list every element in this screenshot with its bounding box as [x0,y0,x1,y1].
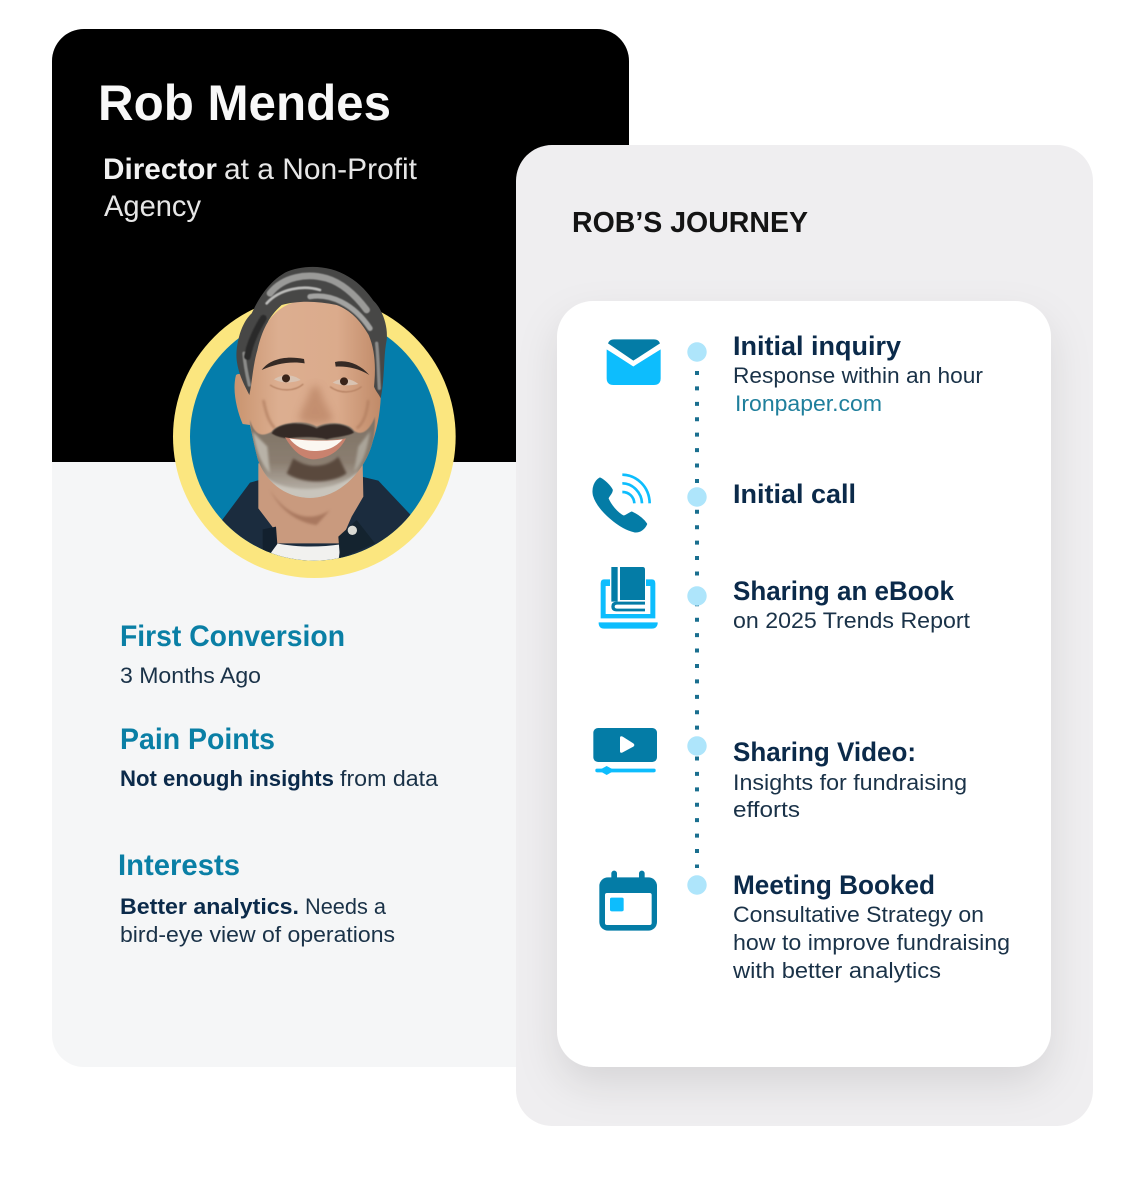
heading: journey: ROB’S JOURNEY [572,207,808,239]
step: sharing video: Insights for fundraising [733,770,967,795]
step: sharing video: efforts [733,797,800,822]
title: name: Rob Mendes [98,75,391,131]
icon: ebook [599,567,658,629]
step: meeting booked: Consultative Strategy on [733,902,984,927]
panel: persona card [52,29,629,1067]
beard [250,417,375,499]
subtitle: role [103,153,418,223]
head [235,299,381,498]
subtitle: role: Agency [104,190,201,223]
step: sharing video: Sharing Video: [733,737,916,767]
panel: timeline card [557,301,1051,1067]
text block: pain points [120,723,438,791]
subtitle: role: Director [103,153,217,186]
text block: interests: Needs a [305,894,386,919]
shirt [222,477,410,561]
icon: envelope [607,339,661,385]
step: initial inquiry: Response within an hour [733,363,984,388]
hair [236,267,387,398]
moustache [272,424,354,439]
text block: interests [118,849,395,947]
collar [263,527,277,553]
icon: phone [594,475,650,531]
subtitle: role: at a Non-Profit [224,153,418,186]
smile [285,437,346,459]
text block: pain points: Pain Points [120,723,275,756]
step: meeting booked: with better analytics [732,958,941,983]
step: sharing an ebook: Sharing an eBook [733,576,955,606]
icon: video [593,728,657,775]
t-shirt [271,543,341,562]
step: meeting booked: Meeting Booked [733,870,935,900]
eyebrows [262,358,305,370]
step: initial inquiry [733,331,984,416]
step: initial inquiry: Initial inquiry [733,331,901,361]
nose shade [299,387,333,424]
neck [258,463,363,543]
step: meeting booked: how to improve fundraising [733,930,1010,955]
step: meeting booked [732,870,1010,983]
step: initial call: Initial call [733,479,856,509]
text block: interests: Better analytics. [120,894,299,919]
yellow ring [173,295,456,578]
step: sharing video [733,737,967,822]
step: sharing an ebook [733,576,971,633]
text block: interests: bird-eye view of operations [120,922,395,947]
step: initial inquiry: Ironpaper.com [735,391,882,416]
panel: black header [52,29,629,462]
eyes [274,375,301,382]
blue backdrop [190,313,438,561]
text block: first conversion [120,620,345,688]
hair highlights [244,276,379,388]
text block: pain points: Not enough insights [120,766,334,791]
icon: calendar [599,871,657,931]
text block: first conversion: First Conversion [120,620,345,653]
portrait: Rob Mendes [173,267,456,578]
text block: pain points: from data [340,766,438,791]
text block: interests: Interests [118,849,240,882]
panel: journey [516,145,1093,1126]
cheek wrinkles [263,400,368,428]
step: sharing an ebook: on 2025 Trends Report [733,608,971,633]
text block: first conversion: 3 Months Ago [120,663,261,688]
timeline [687,342,707,895]
